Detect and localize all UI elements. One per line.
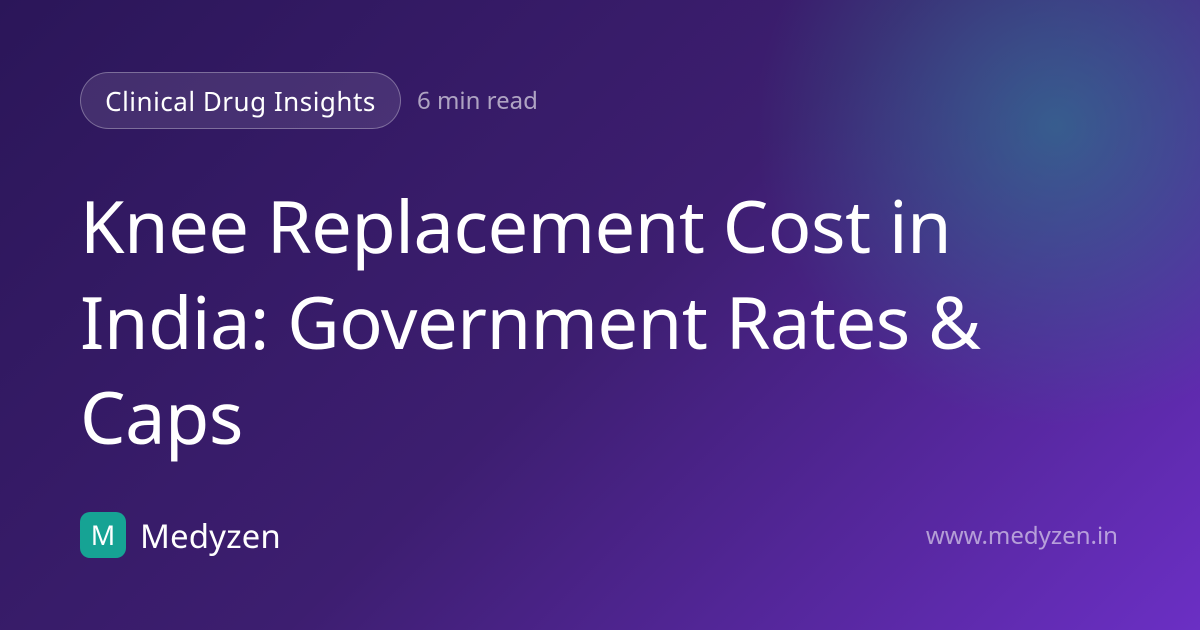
category badge: Clinical Drug Insights	[105, 83, 376, 119]
brand name: Medyzen	[140, 513, 281, 558]
title: India: Government Rates &	[80, 272, 980, 370]
logo mark	[80, 512, 126, 558]
website url: www.medyzen.in	[926, 519, 1118, 552]
category badge	[80, 72, 401, 129]
logo mark: M	[91, 516, 115, 553]
read time: 6 min read	[417, 84, 538, 117]
title: Knee Replacement Cost in	[80, 177, 951, 275]
title	[80, 177, 981, 466]
title: Caps	[80, 368, 243, 466]
